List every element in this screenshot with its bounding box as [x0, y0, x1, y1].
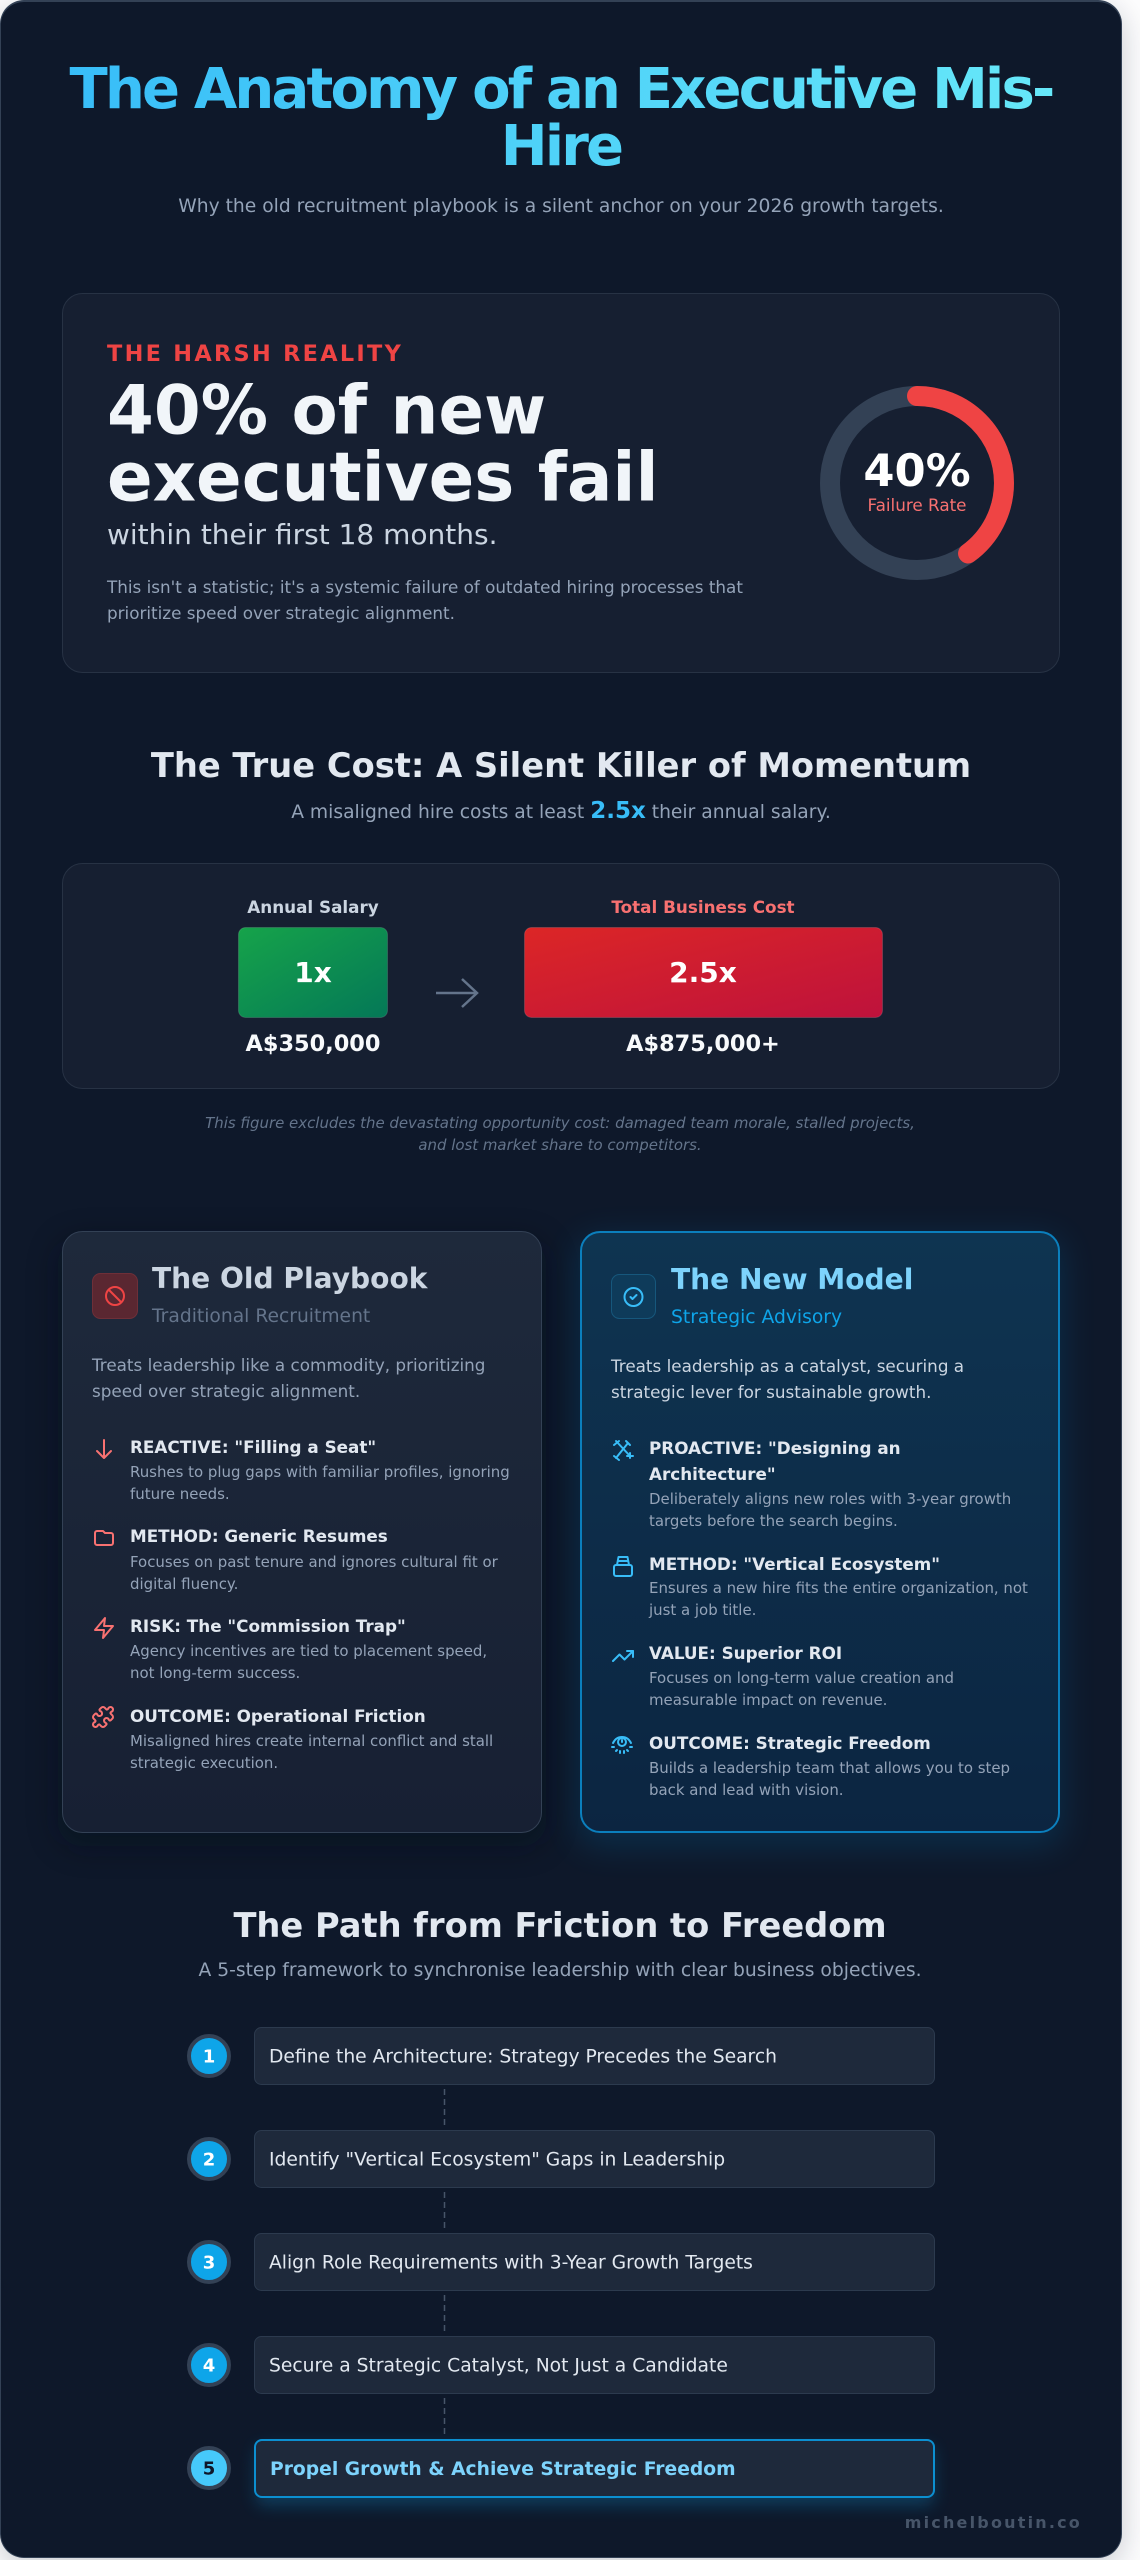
step 3: Align Role Requirements with 3-Year Growth Targets — [269, 2252, 753, 2274]
footnote — [205, 1114, 915, 1154]
description: speed over strategic alignment. — [92, 1381, 360, 1401]
item: value: measurable impact on revenue. — [649, 1691, 887, 1709]
description — [610, 1356, 964, 1402]
footnote: and lost market share to competitors. — [418, 1136, 702, 1154]
step 2: Identify "Vertical Ecosystem" Gaps in Leadership — [269, 2150, 725, 2170]
item: risk — [95, 1616, 487, 1682]
item: reactive — [97, 1437, 510, 1503]
donut chart: 40% failure rate: 40% — [863, 444, 971, 497]
step 5: Propel Growth & Achieve Strategic Freedom — [270, 2459, 736, 2480]
item: value — [613, 1643, 954, 1709]
panel: the harsh reality — [62, 294, 1060, 672]
subheading: Strategic Advisory — [671, 1307, 842, 1328]
bar: annual salary — [238, 897, 388, 1057]
title: Hire — [501, 114, 622, 179]
bar: annual salary: 1x — [294, 956, 332, 989]
item: method — [95, 1526, 499, 1593]
title — [70, 57, 1053, 179]
item: outcome — [93, 1706, 493, 1772]
item: outcome: back and lead with vision. — [649, 1781, 844, 1799]
donut chart: 40% failure rate: Failure Rate — [867, 495, 967, 515]
heading: The New Model — [671, 1263, 913, 1296]
item: outcome: OUTCOME: Strategic Freedom — [649, 1733, 931, 1753]
title: The Anatomy of an Executive Mis- — [70, 57, 1053, 122]
panel: the new model — [576, 1232, 1064, 1848]
icon: ban — [92, 1274, 138, 1318]
item: method: Focuses on past tenure and ignores cultural fit or — [130, 1553, 499, 1571]
step 4: Secure a Strategic Catalyst, Not Just a Candidate — [269, 2356, 728, 2376]
item: reactive: future needs. — [130, 1485, 230, 1503]
item: method: METHOD: Generic Resumes — [130, 1526, 388, 1546]
step 3: 3 — [203, 2252, 215, 2274]
item: risk: RISK: The "Commission Trap" — [130, 1616, 406, 1636]
heading: The Old Playbook — [152, 1262, 429, 1295]
connector lines — [444, 2089, 446, 2436]
heading: true cost: The True Cost: A Silent Killer of Momentum — [151, 746, 971, 785]
bar: total business cost: A$875,000+ — [626, 1031, 780, 1057]
panel: the old playbook — [58, 1232, 546, 1846]
bar: annual salary: A$350,000 — [246, 1031, 380, 1057]
panel: cost comparison — [62, 864, 1060, 1088]
item: proactive: PROACTIVE: "Designing an — [649, 1438, 901, 1458]
subheading: Traditional Recruitment — [151, 1306, 370, 1327]
bar: annual salary: Annual Salary — [247, 897, 379, 917]
subtitle: Why the old recruitment playbook is a silent anchor on your 2026 growth targets. — [178, 196, 944, 217]
footnote: This figure excludes the devastating opportunity cost: damaged team morale, stalled projects, — [205, 1114, 915, 1132]
bar: total business cost: 2.5x — [669, 956, 737, 989]
item: method: METHOD: "Vertical Ecosystem" — [649, 1554, 940, 1574]
step 3 — [189, 2234, 934, 2290]
headline qualifier: within their first 18 months. — [107, 518, 497, 551]
item: method — [614, 1554, 1028, 1619]
item: proactive — [614, 1438, 1011, 1530]
item: outcome: OUTCOME: Operational Friction — [130, 1706, 426, 1726]
subheading: path: A 5-step framework to synchronise leadership with clear business objectives. — [198, 1960, 922, 1981]
item: value: VALUE: Superior ROI — [649, 1643, 842, 1663]
step 1: 1 — [203, 2046, 215, 2068]
step 1: Define the Architecture: Strategy Precedes the Search — [269, 2046, 777, 2068]
heading: path: The Path from Friction to Freedom — [233, 1906, 887, 1945]
step 1 — [189, 2028, 934, 2084]
headline statistic: 40% of new — [107, 372, 546, 450]
subheading: true cost: A misaligned hire costs at least 2.5x their annual salary. — [291, 798, 831, 824]
body text: prioritize speed over strategic alignment. — [107, 603, 455, 623]
step 2: 2 — [203, 2150, 215, 2170]
item: outcome — [612, 1733, 1010, 1799]
description: strategic lever for sustainable growth. — [611, 1382, 931, 1402]
item: proactive: targets before the search begins. — [649, 1512, 898, 1530]
step 5 — [189, 2440, 934, 2506]
watermark: michelboutin.co — [905, 2513, 1082, 2532]
item: outcome: Misaligned hires create internal conflict and stall — [130, 1732, 493, 1750]
step 4 — [189, 2336, 934, 2394]
description: Treats leadership as a catalyst, securing a — [610, 1356, 964, 1376]
headline statistic — [107, 372, 659, 516]
bar: total business cost — [524, 897, 882, 1057]
item: method: digital fluency. — [130, 1575, 238, 1593]
item: proactive: Architecture" — [649, 1464, 776, 1484]
icon: check circle — [612, 1274, 656, 1318]
eyebrow label: THE HARSH REALITY — [107, 341, 403, 367]
bar: total business cost: Total Business Cost — [611, 897, 795, 917]
headline statistic: executives fail — [107, 438, 659, 516]
description — [91, 1355, 485, 1401]
step 4: 4 — [203, 2356, 215, 2376]
item: proactive: Deliberately aligns new roles with 3-year growth — [649, 1490, 1011, 1508]
item: outcome: Builds a leadership team that allows you to step — [649, 1759, 1010, 1777]
item: method: just a job title. — [648, 1601, 756, 1619]
item: value: Focuses on long-term value creation and — [649, 1669, 954, 1687]
item: method: Ensures a new hire fits the entire organization, not — [649, 1579, 1028, 1597]
body text: This isn't a statistic; it's a systemic failure of outdated hiring processes that — [106, 577, 743, 597]
item: outcome: strategic execution. — [130, 1754, 278, 1772]
body text — [106, 577, 743, 623]
step 5: 5 — [203, 2458, 215, 2480]
item: reactive: Rushes to plug gaps with familiar profiles, ignoring — [130, 1463, 510, 1481]
item: risk: not long-term success. — [130, 1664, 300, 1682]
arrow — [436, 979, 477, 1007]
step 2 — [189, 2130, 934, 2188]
item: risk: Agency incentives are tied to placement speed, — [130, 1642, 487, 1660]
donut chart: 40% failure rate — [830, 396, 1004, 570]
item: reactive: REACTIVE: "Filling a Seat" — [130, 1437, 376, 1457]
description: Treats leadership like a commodity, prioritizing — [91, 1355, 485, 1375]
